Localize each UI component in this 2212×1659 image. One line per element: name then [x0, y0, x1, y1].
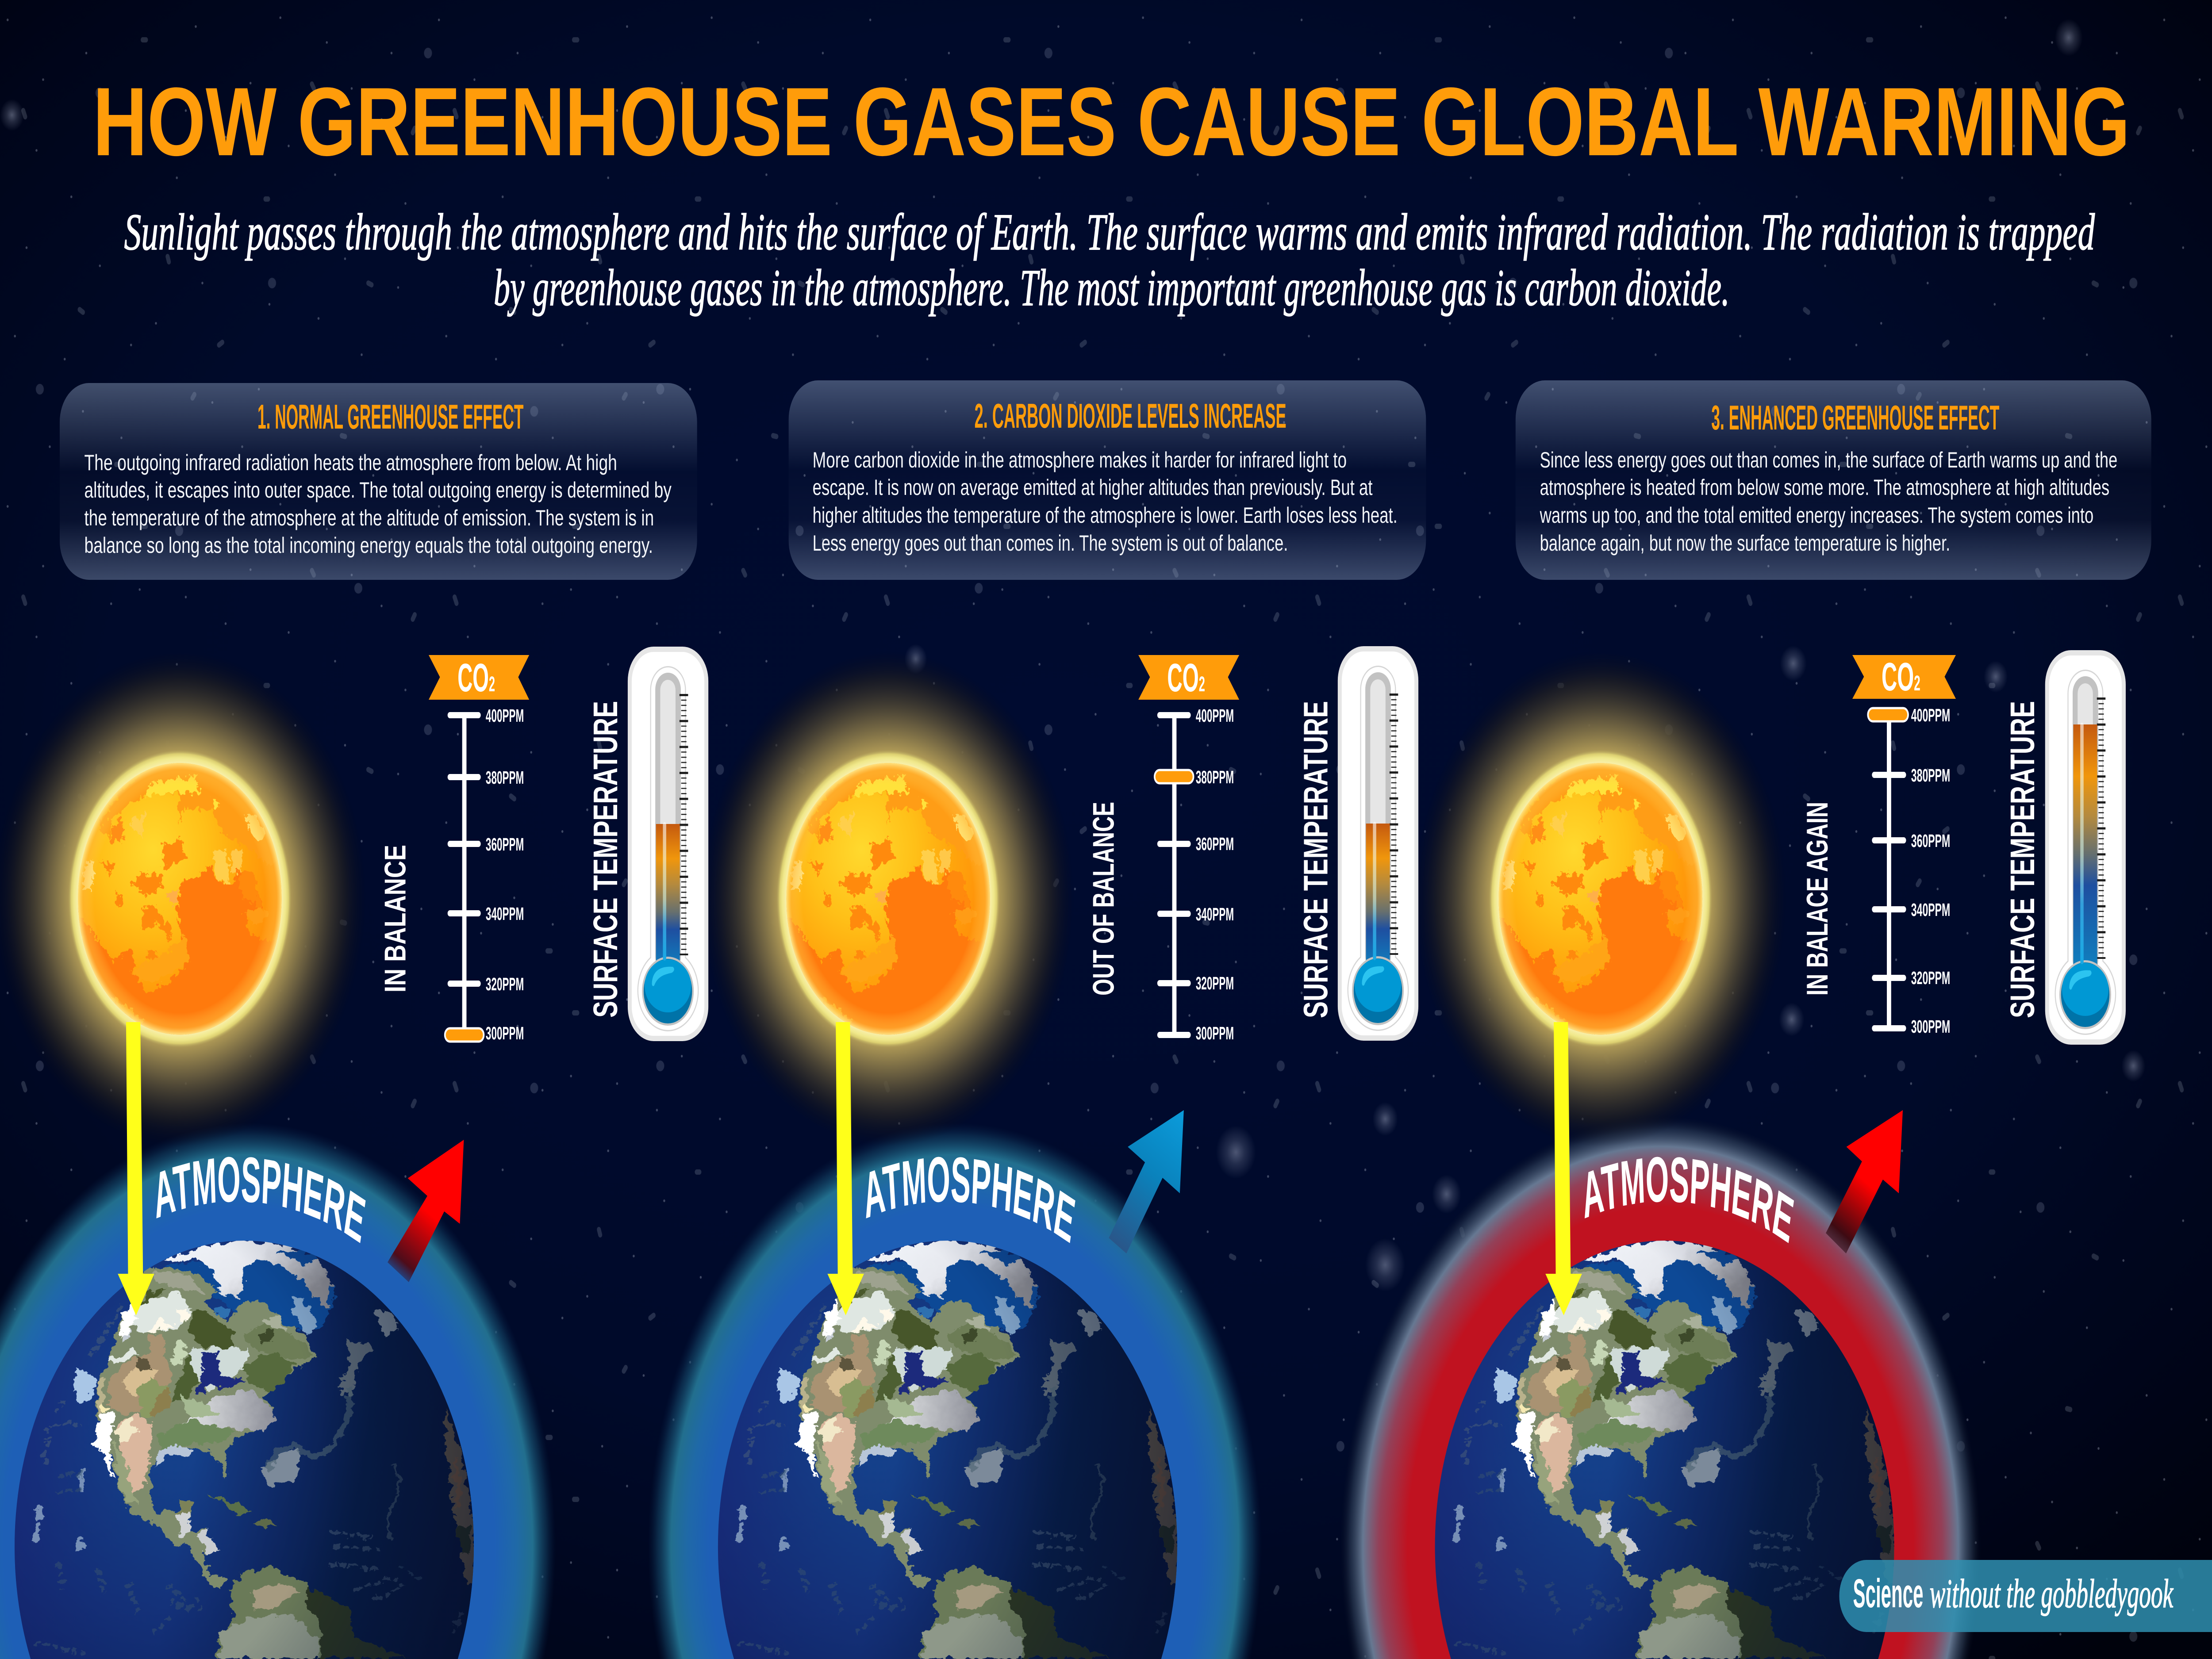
CO2 scale 1: 400PPM [486, 705, 524, 726]
body text 1: balance so long as the total incoming energy equals the total outgoing energy. [84, 533, 653, 558]
outgoing infrared arrow 1 [388, 1140, 464, 1282]
CO2 scale 1: 360PPM [486, 834, 524, 854]
body text 1: the temperature of the atmosphere at the altitude of emission. The system is in [84, 506, 654, 530]
heading 1: 1. NORMAL GREENHOUSE EFFECT [257, 398, 523, 436]
earth 3 [1435, 1241, 1895, 1659]
atmosphere 1 [0, 1123, 556, 1659]
CO2 scale 3 [1852, 655, 1956, 1037]
body text 3 [1540, 448, 2117, 556]
panel: 2. carbon dioxide levels increase [789, 380, 1426, 580]
earth 2 [718, 1241, 1178, 1659]
body text 3: balance again, but now the surface temperature is higher. [1540, 531, 1950, 556]
title: HOW GREENHOUSE GASES CAUSE GLOBAL WARMING [93, 68, 2130, 176]
heading 3: 3. ENHANCED GREENHOUSE EFFECT [1711, 398, 1999, 437]
body text 3: Since less energy goes out than comes in, the surface of Earth warms up and the [1540, 448, 2117, 472]
outgoing infrared arrow 3 [1826, 1110, 1903, 1253]
body text 2: More carbon dioxide in the atmosphere makes it harder for infrared light to [813, 448, 1347, 472]
thermometer 1 [630, 649, 707, 1038]
CO2 banner 3 [1852, 655, 1956, 699]
CO2 scale 2: 360PPM [1196, 834, 1234, 854]
CO2 scale 2: 320PPM [1196, 973, 1234, 993]
panel: 1. normal greenhouse effect [60, 383, 697, 580]
body text 2 [813, 448, 1398, 556]
body text 1: altitudes, it escapes into outer space. The total outgoing energy is determined by [84, 478, 672, 502]
CO2 scale 2: 300PPM [1196, 1023, 1234, 1043]
surface temperature label 2: SURFACE TEMPERATURE [1297, 701, 1335, 1018]
body text 3: warms up too, and the total emitted energy increases. The system comes into [1540, 503, 2093, 528]
panel: 3. enhanced greenhouse effect [1516, 380, 2151, 580]
outgoing infrared arrow 2 [1109, 1110, 1184, 1253]
CO2 scale 3: 380PPM [1911, 765, 1950, 785]
atmosphere label 3: ATMOSPHERE [1579, 1143, 1797, 1257]
body text 1 [84, 451, 672, 558]
body text 2: higher altitudes the temperature of the atmosphere is lower. Earth loses less heat. [813, 503, 1398, 528]
atmosphere label 1: ATMOSPHERE [151, 1143, 369, 1257]
body text 1: The outgoing infrared radiation heats the atmosphere from below. At high [84, 451, 617, 475]
CO2 scale 1: 380PPM [486, 767, 524, 788]
CO2 scale 2 [1138, 655, 1239, 1043]
CO2 scale 2: 340PPM [1196, 904, 1234, 924]
surface temperature label 1: SURFACE TEMPERATURE [587, 701, 625, 1018]
surface temperature label 3: SURFACE TEMPERATURE [2004, 701, 2042, 1018]
CO2 scale 3: 320PPM [1911, 968, 1950, 988]
sunlight arrow 3 [1545, 1022, 1582, 1315]
CO2 scale 1: 320PPM [486, 974, 524, 994]
subtitle [124, 203, 2095, 317]
sun 3 [1415, 651, 1786, 1146]
CO2 scale 1: 300PPM [486, 1023, 524, 1043]
balance label 2: OUT OF BALANCE [1087, 802, 1120, 996]
atmosphere 2 [648, 1123, 1262, 1659]
thermometer 2 [1340, 649, 1417, 1038]
logo: science without the gobbledygook: Science [1853, 1571, 1924, 1616]
sun 1 [0, 651, 365, 1146]
subtitle: by greenhouse gases in the atmosphere. The most important greenhouse gas is carbon dioxide. [494, 259, 1730, 317]
sun 2 [703, 651, 1074, 1146]
CO2 scale 2: 400PPM [1196, 705, 1234, 726]
balance label 3: IN BALACE AGAIN [1801, 802, 1834, 996]
body text 2: escape. It is now on average emitted at higher altitudes than previously. But at [813, 475, 1373, 500]
logo: science without the gobbledygook [1839, 1560, 2212, 1632]
CO2 banner 3: CO2 [1882, 655, 1920, 699]
CO2 scale 3: 300PPM [1911, 1016, 1950, 1037]
CO2 scale 3: 360PPM [1911, 831, 1950, 851]
CO2 banner 2: CO2 [1167, 655, 1205, 700]
heading 2: 2. CARBON DIOXIDE LEVELS INCREASE [975, 397, 1286, 435]
body text 2: Less energy goes out than comes in. The system is out of balance. [813, 531, 1288, 556]
sunlight arrow 2 [827, 1022, 864, 1315]
body text 3: atmosphere is heated from below some more. The atmosphere at high altitudes [1540, 475, 2109, 500]
CO2 scale 3: 400PPM [1911, 705, 1950, 725]
CO2 scale 3: 340PPM [1911, 900, 1950, 920]
CO2 banner 2 [1138, 655, 1239, 700]
CO2 scale 2: 380PPM [1196, 767, 1234, 787]
earth 1 [15, 1241, 475, 1659]
sunlight arrow 1 [118, 1022, 154, 1315]
CO2 scale 1 [429, 655, 529, 1043]
CO2 banner 1 [429, 655, 529, 700]
CO2 banner 1: CO2 [457, 655, 495, 700]
atmosphere 3 [1340, 1116, 1981, 1659]
CO2 scale 1: 340PPM [486, 904, 524, 924]
balance label 1: IN BALANCE [378, 845, 412, 992]
atmosphere label 2: ATMOSPHERE [860, 1143, 1079, 1257]
thermometer 3 [2047, 653, 2124, 1042]
